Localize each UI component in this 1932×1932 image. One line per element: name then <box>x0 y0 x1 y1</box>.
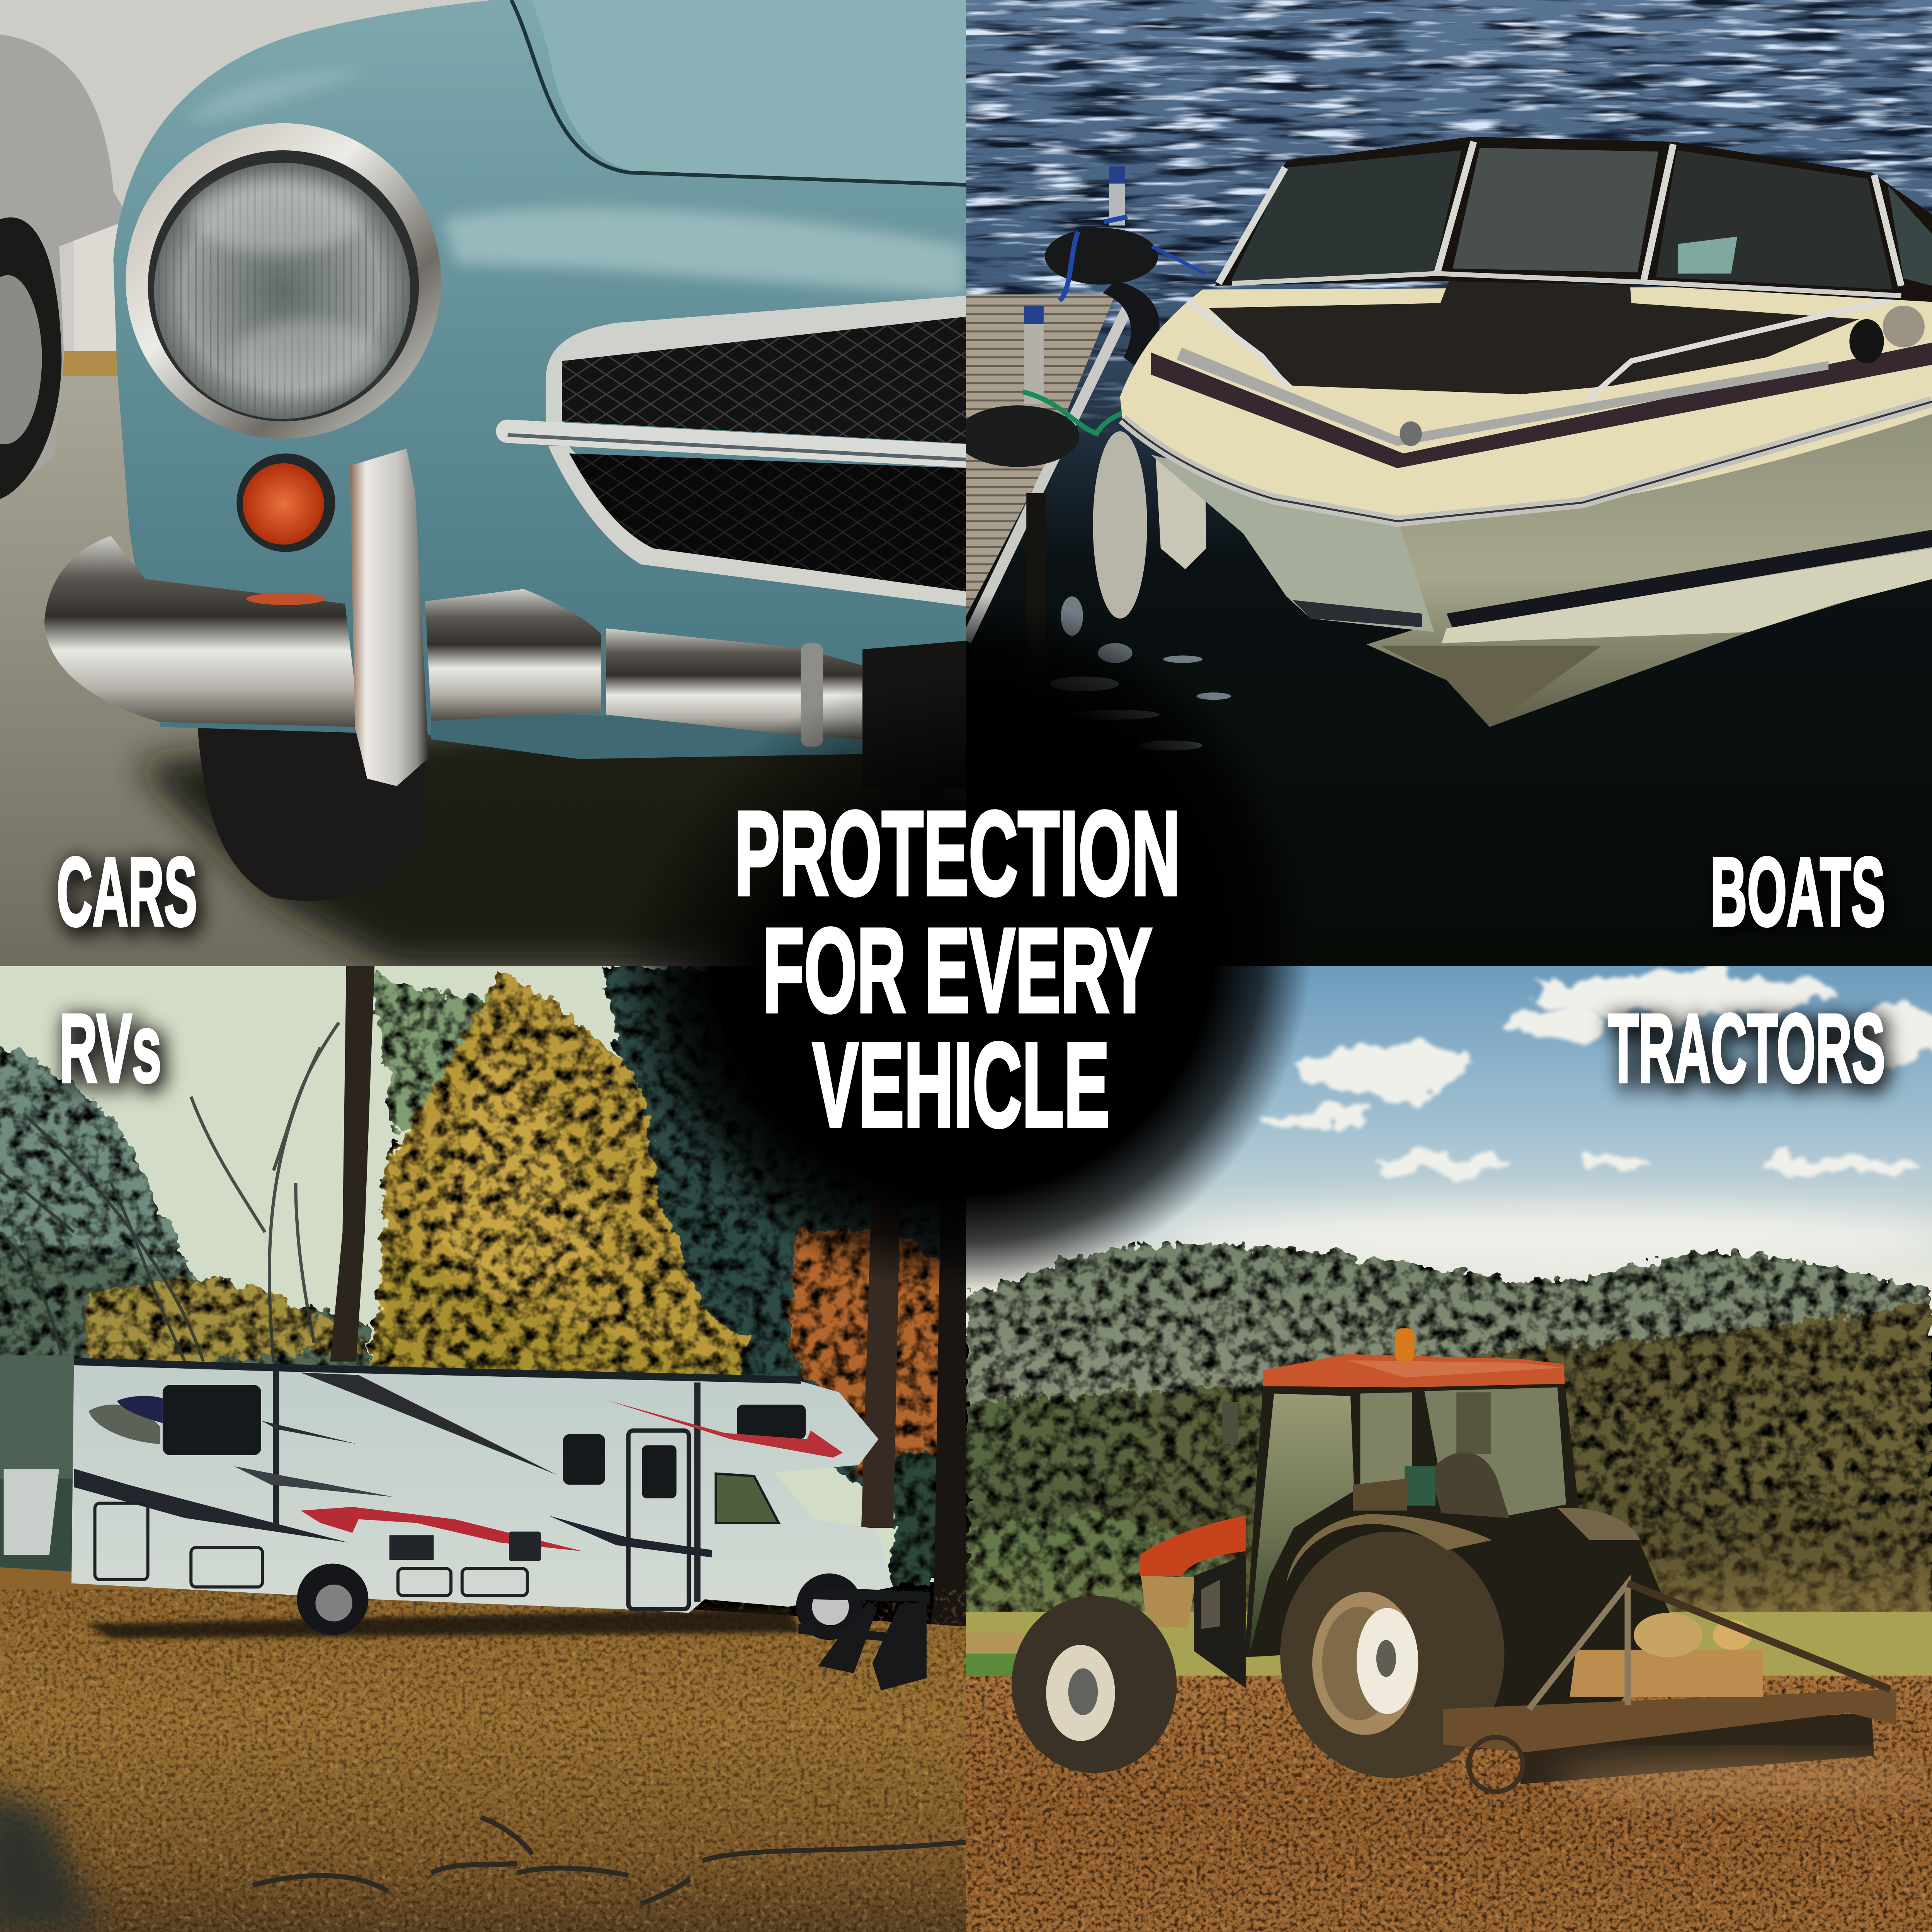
headline: FOR EVERY <box>763 903 1152 1037</box>
horn <box>1849 306 1925 364</box>
RV wheels <box>297 1564 862 1640</box>
headline: VEHICLE <box>813 1018 1109 1152</box>
green field <box>966 1612 1932 1685</box>
licence plate mount <box>862 641 966 789</box>
implement dust <box>1553 1761 1932 1800</box>
far hills <box>966 1244 1932 1479</box>
rear wheel <box>1280 1532 1504 1778</box>
boat rails <box>1188 289 1932 399</box>
soil <box>966 1676 1932 1932</box>
boat deck <box>1120 281 1932 521</box>
label: RVs <box>59 994 165 1107</box>
label: cars: CARS <box>57 838 197 946</box>
label: cars <box>57 838 201 951</box>
panel: boats <box>956 0 1932 967</box>
centre spotlight: car side <box>0 0 966 966</box>
tyre <box>197 721 425 901</box>
water ripples <box>966 0 1932 444</box>
ground <box>0 1567 966 1932</box>
RV stripes <box>301 1372 557 1475</box>
yellow tree <box>365 972 749 1392</box>
dock <box>966 166 1129 697</box>
panel: cars <box>0 0 966 966</box>
tractor hood <box>1140 1515 1246 1688</box>
rear fender <box>1558 1508 1640 1540</box>
front wheel <box>1012 1595 1177 1773</box>
motorhome <box>71 1362 893 1640</box>
storage hatches <box>95 1503 527 1595</box>
RV windows <box>163 1385 806 1498</box>
bumper guard <box>350 449 429 786</box>
headlight <box>126 123 441 439</box>
distant RV <box>4 1469 59 1555</box>
parked silver car <box>0 34 129 499</box>
floor shadow <box>136 665 966 966</box>
windshield <box>1215 137 1932 302</box>
picnic table <box>798 1587 930 1690</box>
tall trunks <box>861 1158 966 1728</box>
label: RVs: RVs <box>59 994 162 1103</box>
pine trunk <box>330 966 374 1362</box>
implement <box>1443 1583 1896 1791</box>
water reflections <box>1050 596 1231 750</box>
label: RVs: RVs <box>63 999 165 1108</box>
ground roots and leaves <box>253 1817 966 1904</box>
clouds <box>1170 972 1932 1270</box>
headline <box>735 786 1180 1152</box>
near forest <box>966 1304 1932 1626</box>
car body <box>113 0 966 754</box>
label: cars: CARS <box>60 843 201 951</box>
bumper <box>44 536 862 747</box>
tractor cab <box>1222 1328 1677 1750</box>
panel: RVs <box>0 966 966 1932</box>
bare trees <box>0 1023 339 1362</box>
lower body strip <box>431 709 862 759</box>
grille <box>508 296 966 606</box>
amber marker light <box>236 453 335 552</box>
RV shadow <box>86 1608 801 1639</box>
forest background <box>0 966 966 1583</box>
boat hull <box>1151 394 1932 727</box>
tractor <box>1012 1328 1896 1791</box>
headline: PROTECTION <box>735 786 1180 920</box>
dock tyres and ropes <box>956 217 1349 467</box>
fenders <box>1093 431 1206 619</box>
RV door <box>628 1430 689 1609</box>
centre spotlight: other panels <box>615 594 1312 1291</box>
mudguard <box>1286 1514 1492 1583</box>
panel: tractors <box>966 966 1932 1932</box>
